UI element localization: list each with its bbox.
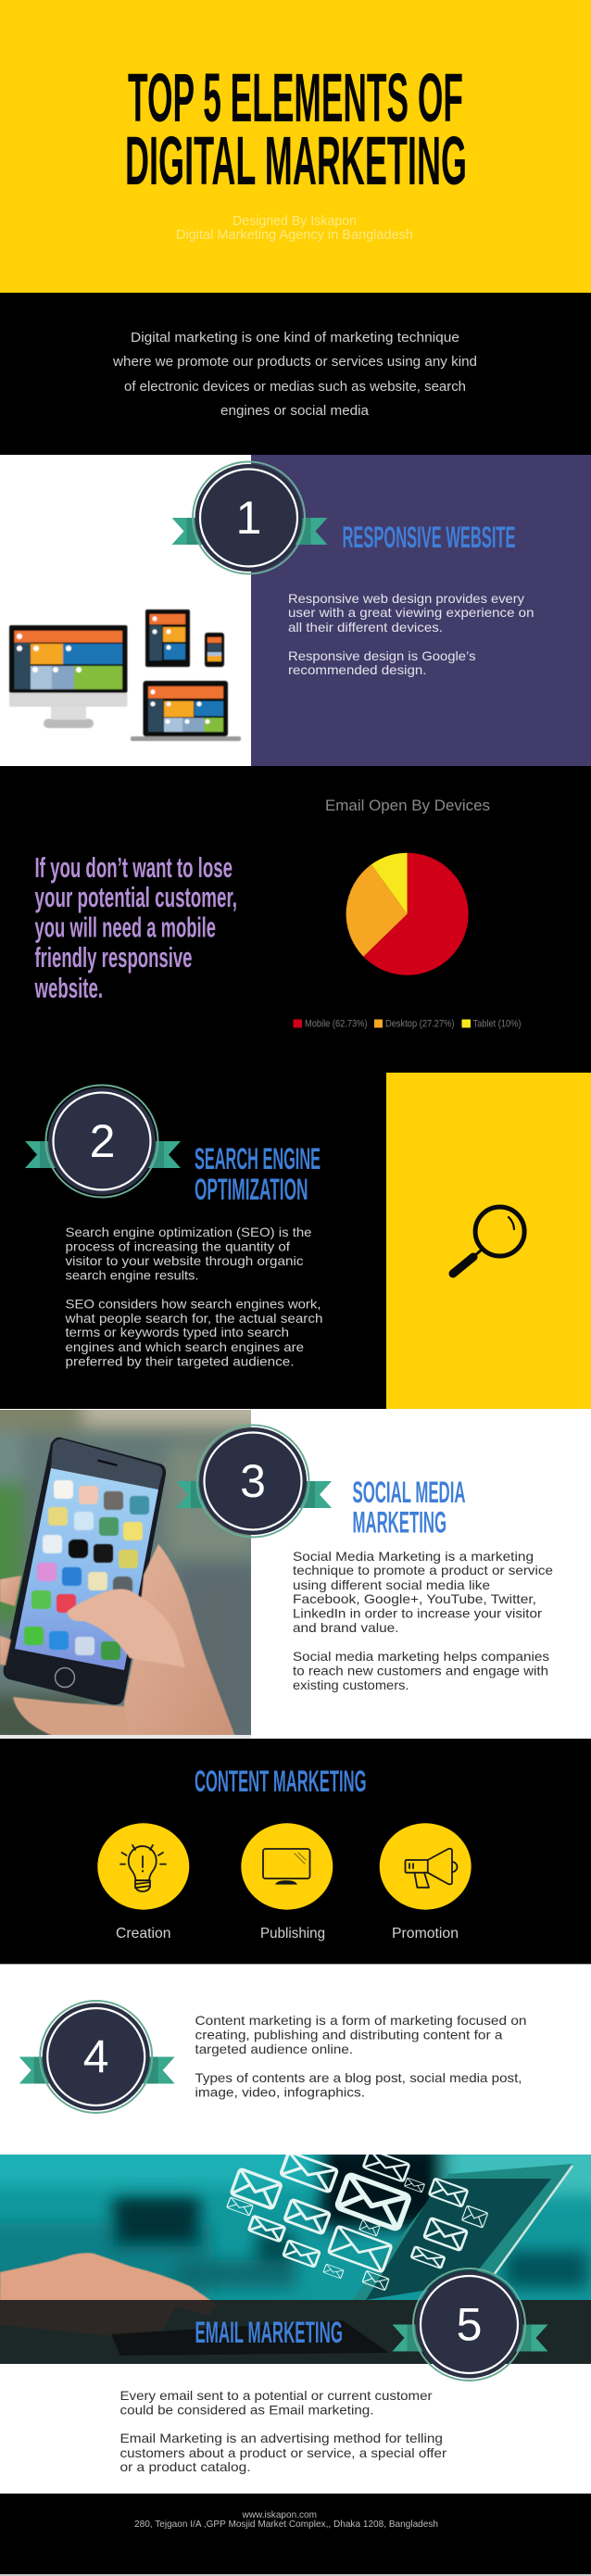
text: seo description: terms or keywords typed into search xyxy=(65,1325,289,1339)
icon: laptop xyxy=(131,681,241,741)
panel: mobile statistic xyxy=(0,766,591,1073)
text: seo description: what people search for, the actual search xyxy=(64,1311,322,1326)
callout: mobile friendly message: your potential customer, xyxy=(35,881,237,913)
text: seo description: Search engine optimization (SEO) is the xyxy=(65,1225,312,1239)
text: social media description: using different social media like xyxy=(293,1577,490,1592)
icon: tablet xyxy=(145,609,190,667)
icon: desktop monitor xyxy=(9,625,128,728)
text: social media description: to reach new customers and engage with xyxy=(293,1664,548,1678)
text: email marketing description: Every email sent to a potential or current customer xyxy=(120,2388,433,2403)
app icons xyxy=(24,1480,149,1660)
badge: number 2: 2 xyxy=(90,1115,115,1167)
panel: footer xyxy=(0,2494,591,2576)
badge: number 3 xyxy=(176,1425,332,1538)
heading: content marketing: CONTENT MARKETING xyxy=(195,1765,367,1798)
subtitle: Digital Marketing Agency in Bangladesh xyxy=(176,227,413,243)
labels: content stages: Creation xyxy=(116,1926,170,1941)
photo: emails flying from laptop xyxy=(0,2140,591,2364)
chart title: Email Open By Devices xyxy=(325,797,490,814)
text: social media description: LinkedIn in order to increase your visitor xyxy=(293,1606,542,1621)
envelopes xyxy=(227,2150,488,2291)
text: social media description: Social media marketing helps companies xyxy=(293,1649,549,1664)
text: responsive description: recommended design. xyxy=(288,662,426,677)
callout: mobile friendly message: you will need a mobile xyxy=(35,911,216,943)
callout: mobile friendly message: website. xyxy=(34,972,103,1004)
text: social media description xyxy=(293,1549,553,1692)
heading: social media marketing: MARKETING xyxy=(352,1506,446,1539)
icon: publishing monitor xyxy=(241,1823,333,1910)
badge: number 4: 4 xyxy=(83,2030,109,2082)
panel: content marketing xyxy=(0,1739,591,1965)
dark caption band xyxy=(0,2300,591,2364)
text: responsive description xyxy=(288,591,534,677)
badge: number 1: 1 xyxy=(236,492,261,544)
text: content marketing description: image, video, infographics. xyxy=(195,2084,365,2099)
laptop screen xyxy=(350,2164,572,2303)
icon: promotion megaphone xyxy=(380,1823,472,1910)
text: content marketing description: creating, publishing and distributing content for a xyxy=(195,2027,503,2042)
hand xyxy=(0,1544,235,1737)
text: email marketing description: or a product catalog. xyxy=(120,2459,250,2474)
chart legend: Mobile (62.73%) xyxy=(305,1019,367,1030)
text: content marketing description: Content marketing is a form of marketing focused on xyxy=(195,2013,526,2028)
text: seo description: preferred by their targeted audience. xyxy=(65,1354,295,1369)
badge: number 3: 3 xyxy=(240,1455,266,1507)
subtitle xyxy=(176,213,413,243)
heading: search engine optimization: SEARCH ENGINE xyxy=(195,1142,321,1175)
callout: mobile friendly message xyxy=(34,851,237,1004)
subtitle: Designed By Iskapon xyxy=(233,213,357,229)
photo: hand holding smartphone xyxy=(0,1410,251,1735)
heading: social media marketing xyxy=(352,1476,465,1539)
illustration: responsive devices xyxy=(9,609,241,741)
chart legend: Tablet (10%) xyxy=(472,1019,521,1030)
chart legend xyxy=(293,1019,521,1030)
text: seo description: visitor to your website through organic xyxy=(65,1253,304,1268)
intro text: where we promote our products or services using any kind xyxy=(112,354,477,370)
title xyxy=(125,59,467,199)
text: responsive description: all their different devices. xyxy=(288,620,443,635)
intro text: of electronic devices or medias such as website, search xyxy=(124,379,466,395)
panel: social media marketing xyxy=(0,1410,552,1739)
intro text: engines or social media xyxy=(220,403,370,419)
text: seo description: SEO considers how search engines work, xyxy=(65,1297,321,1312)
badge: number 2 xyxy=(25,1086,181,1197)
heading: search engine optimization xyxy=(195,1142,321,1206)
text: content marketing description xyxy=(195,2013,526,2099)
footer text: www.iskapon.com xyxy=(242,2509,317,2520)
text: content marketing description: targeted audience online. xyxy=(195,2042,353,2056)
icon: magnifying glass xyxy=(453,1207,524,1274)
heading: social media marketing: SOCIAL MEDIA xyxy=(352,1476,465,1509)
intro text: Digital marketing is one kind of marketing technique xyxy=(131,330,459,346)
panel: header xyxy=(0,0,591,293)
icon: creation light bulb xyxy=(97,1823,189,1910)
text: seo description: process of increasing the quantity of xyxy=(65,1239,290,1254)
text: email marketing description: could be considered as Email marketing. xyxy=(120,2403,374,2418)
phone body xyxy=(4,1438,166,1704)
badge: number 5 xyxy=(393,2268,548,2381)
intro text xyxy=(112,330,477,419)
heading: email marketing: EMAIL MARKETING xyxy=(195,2316,343,2349)
phone screen xyxy=(15,1468,158,1670)
callout: mobile friendly message: friendly responsive xyxy=(35,941,193,974)
text: social media description: existing customers. xyxy=(293,1678,409,1692)
panel: responsive website xyxy=(0,455,591,766)
chart legend: Desktop (27.27%) xyxy=(385,1019,454,1030)
text: email marketing description: Email Marketing is an advertising method for telling xyxy=(120,2431,443,2445)
panel: content marketing description xyxy=(0,1965,591,2155)
text: social media description: Facebook, Google+, YouTube, Twitter, xyxy=(293,1591,536,1606)
footer text: 280, Tejgaon I/A ,GPP Mosjid Market Complex,, Dhaka 1208, Bangladesh xyxy=(134,2519,438,2530)
text: social media description: technique to promote a product or service xyxy=(293,1563,553,1577)
text: responsive description: Responsive web design provides every xyxy=(288,591,524,606)
panel: email marketing xyxy=(0,2140,591,2494)
callout: mobile friendly message: If you don’t want to lose xyxy=(35,851,233,884)
icon: phone xyxy=(205,633,224,667)
text: seo description xyxy=(64,1225,322,1369)
labels: content stages xyxy=(116,1926,459,1941)
badge: number 1 xyxy=(172,461,328,574)
text: seo description: engines and which search engines are xyxy=(65,1339,304,1354)
panel: introduction xyxy=(0,293,591,455)
footer text xyxy=(134,2509,438,2530)
text: responsive description: user with a great viewing experience on xyxy=(288,605,534,620)
hand on keyboard xyxy=(0,2253,217,2336)
badge: number 5: 5 xyxy=(457,2299,482,2351)
phone speaker and home button xyxy=(97,1459,118,1466)
pie chart xyxy=(346,853,469,975)
badge: number 4 xyxy=(19,2001,175,2113)
labels: content stages: Promotion xyxy=(392,1926,459,1941)
text: social media description: and brand value. xyxy=(293,1620,398,1635)
text: responsive description: Responsive design is Google’s xyxy=(288,648,476,663)
text: content marketing description: Types of contents are a blog post, social media post, xyxy=(195,2070,522,2085)
text: social media description: Social Media Marketing is a marketing xyxy=(293,1549,534,1564)
text: email marketing description xyxy=(120,2388,446,2474)
text: email marketing description: customers about a product or service, a special offer xyxy=(120,2445,446,2460)
text: seo description: search engine results. xyxy=(65,1267,198,1282)
heading: search engine optimization: OPTIMIZATION xyxy=(195,1173,308,1206)
panel: search engine optimization xyxy=(0,1073,591,1409)
labels: content stages: Publishing xyxy=(260,1926,325,1941)
